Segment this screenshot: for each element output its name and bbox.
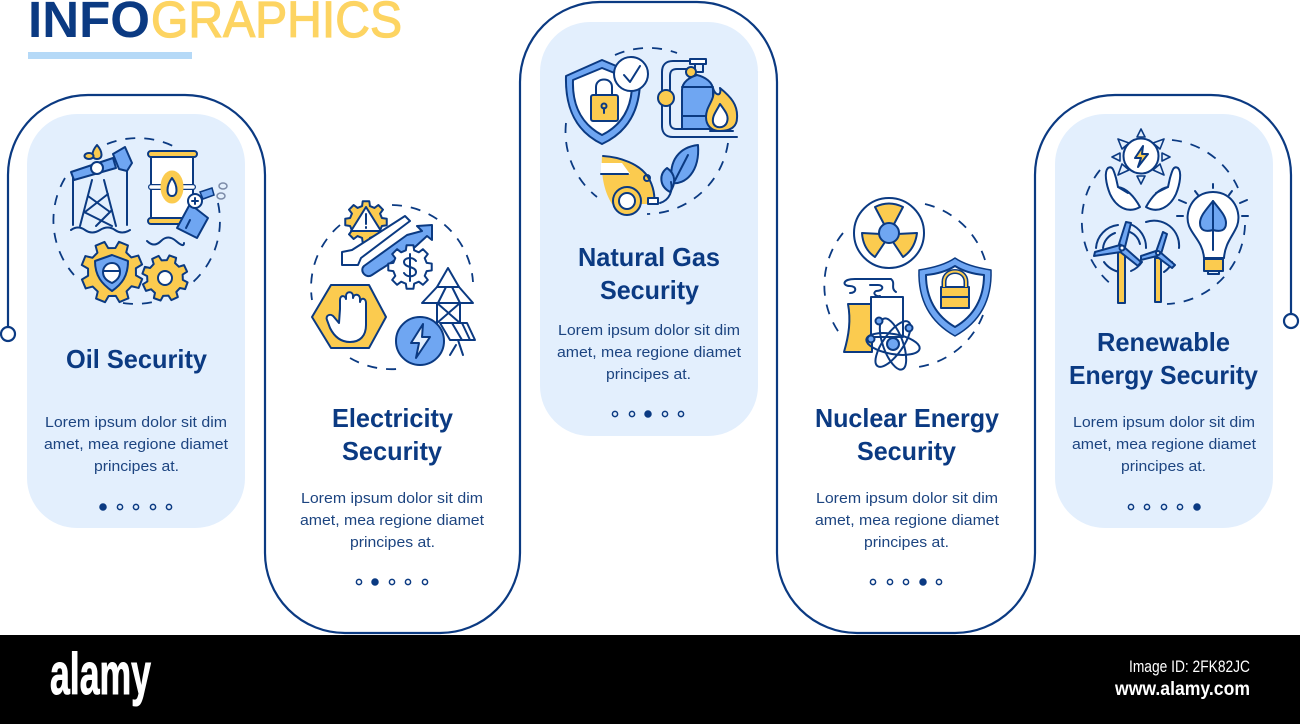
- icon: natural gas security: [566, 48, 737, 215]
- heading: Nuclear Energy: [815, 403, 1000, 433]
- text block: amet, mea regione diamet: [557, 344, 742, 361]
- heading: Security: [342, 436, 443, 466]
- text block: Lorem ipsum dolor sit dim: [45, 414, 227, 431]
- heading: Electricity: [332, 403, 454, 433]
- heading: Security: [600, 275, 700, 305]
- text block: [1072, 414, 1257, 475]
- panel: renewable energy security: [1055, 114, 1273, 528]
- text block: principes at.: [606, 366, 691, 383]
- image id: Image ID: 2FK82JC: [1129, 657, 1250, 676]
- heading: Security: [857, 436, 957, 466]
- heading: Natural Gas: [578, 242, 720, 272]
- title underline: [28, 52, 192, 59]
- text block: principes at.: [1121, 458, 1206, 475]
- heading: [1069, 327, 1259, 390]
- icon: oil security: [53, 138, 227, 312]
- footer bar: [0, 635, 1300, 724]
- panel: oil security: [27, 114, 245, 528]
- text block: principes at.: [350, 534, 435, 551]
- pagination dots: [870, 579, 942, 585]
- panel: electricity security: [300, 201, 485, 585]
- heading: Oil Security: [66, 344, 208, 374]
- text block: principes at.: [94, 458, 179, 475]
- pagination dots: [1128, 504, 1200, 510]
- icon: nuclear energy security: [824, 198, 991, 373]
- heading: [815, 403, 1000, 466]
- text block: [44, 414, 229, 475]
- pagination dots: [356, 579, 428, 585]
- alamy logo: alamy: [50, 642, 151, 707]
- text block: Lorem ipsum dolor sit dim: [816, 490, 998, 507]
- heading: [578, 242, 720, 305]
- text block: [557, 322, 742, 383]
- text block: amet, mea regione diamet: [815, 512, 1000, 529]
- icon: renewable energy security: [1082, 129, 1248, 304]
- text block: Lorem ipsum dolor sit dim: [301, 490, 483, 507]
- text block: [815, 490, 1000, 551]
- heading: Renewable: [1097, 327, 1230, 357]
- icon: electricity security: [311, 201, 475, 369]
- site url: www.alamy.com: [1114, 679, 1250, 700]
- text block: Lorem ipsum dolor sit dim: [558, 322, 740, 339]
- text block: amet, mea regione diamet: [44, 436, 229, 453]
- text block: amet, mea regione diamet: [1072, 436, 1257, 453]
- title: [28, 0, 402, 48]
- text block: Lorem ipsum dolor sit dim: [1073, 414, 1255, 431]
- panel: natural gas security: [540, 22, 758, 436]
- text block: amet, mea regione diamet: [300, 512, 485, 529]
- text block: [300, 490, 485, 551]
- pagination dots: [612, 411, 684, 417]
- pagination dots: [100, 504, 172, 510]
- heading: [332, 403, 454, 466]
- text block: principes at.: [864, 534, 949, 551]
- heading: Energy Security: [1069, 360, 1259, 390]
- panel: nuclear energy security: [815, 198, 1000, 585]
